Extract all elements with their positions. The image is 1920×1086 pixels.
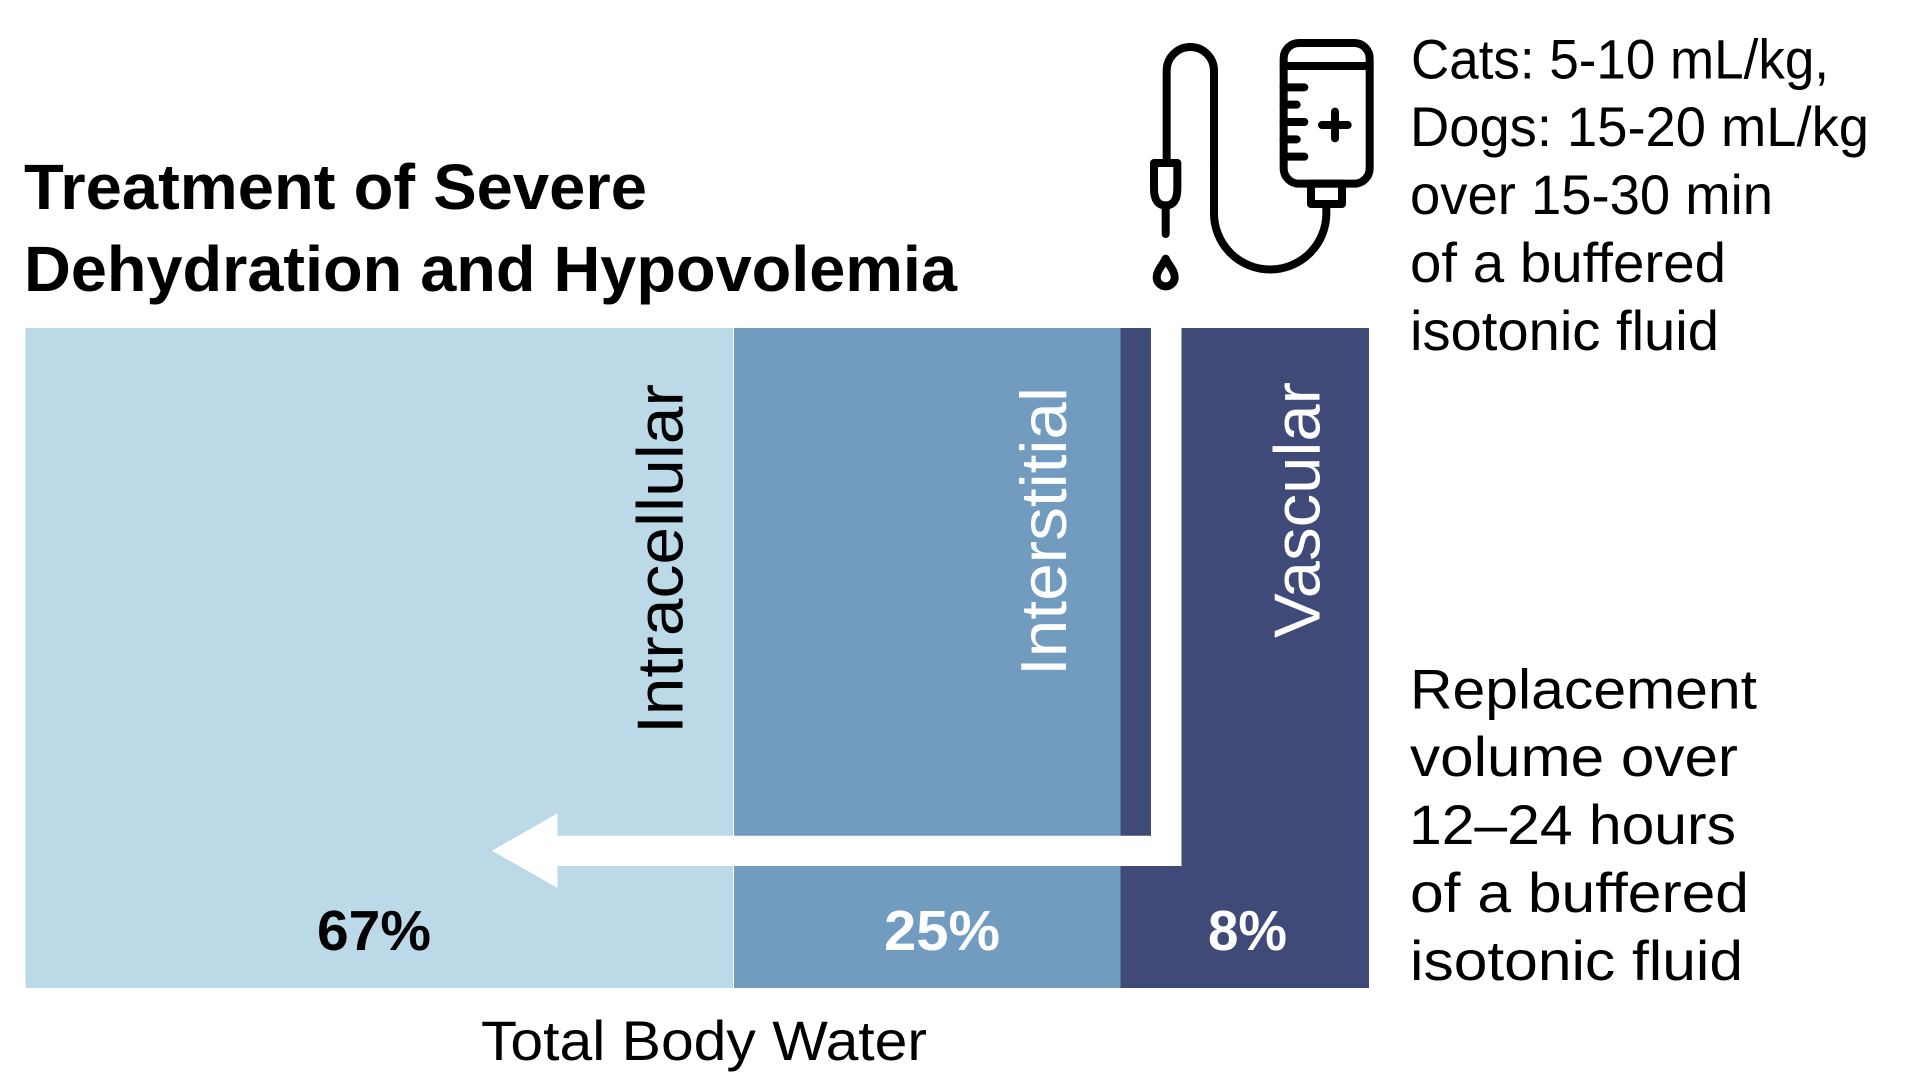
- icon part: tubing: [1167, 47, 1326, 269]
- label: Intracellular: Intracellular: [623, 384, 696, 734]
- label: Interstitial: Interstitial: [1007, 387, 1080, 676]
- segment: intracellular 67%: [26, 328, 733, 988]
- segment: interstitial 25%: [734, 328, 1120, 988]
- axis label: Total Body Water: Total Body Water: [481, 1009, 927, 1072]
- icon part: bag details: [1284, 66, 1370, 157]
- value: 25%: 25%: [884, 899, 1000, 963]
- text block: bolus dosing: over 15-30 min: [1410, 163, 1773, 226]
- icon part: bag: [1284, 43, 1370, 184]
- text block: bolus dosing: Cats: 5-10 mL/kg,: [1411, 28, 1829, 90]
- label: Vascular: Vascular: [1260, 382, 1334, 638]
- icon part: connector: [1154, 163, 1177, 234]
- text block: replacement volume: volume over: [1410, 725, 1738, 788]
- value: 67%: 67%: [317, 899, 431, 963]
- segment: vascular 8%: [1120, 328, 1369, 988]
- text block: bolus dosing: Dogs: 15-20 mL/kg: [1410, 95, 1869, 158]
- text block: bolus dosing: [1410, 28, 1869, 362]
- stacked bar: total body water: [26, 328, 1369, 988]
- text block: replacement volume: of a buffered: [1410, 861, 1749, 924]
- text block: replacement volume: 12–24 hours: [1409, 793, 1736, 856]
- icon part: bag neck: [1311, 184, 1342, 204]
- text block: replacement volume: Replacement: [1410, 658, 1757, 720]
- icon part: drop: [1157, 259, 1175, 286]
- arrow: fluid flow into compartments: [492, 328, 1182, 888]
- title: [24, 151, 957, 305]
- value: 8%: 8%: [1208, 899, 1287, 963]
- text block: replacement volume: [1409, 658, 1757, 992]
- text block: replacement volume: isotonic fluid: [1410, 929, 1743, 992]
- title: Dehydration and Hypovolemia: [24, 233, 957, 305]
- text block: bolus dosing: of a buffered: [1410, 231, 1726, 294]
- title: Treatment of Severe: [24, 151, 647, 223]
- text block: bolus dosing: isotonic fluid: [1410, 299, 1719, 362]
- icon: IV drip bag and line: [1154, 43, 1370, 286]
